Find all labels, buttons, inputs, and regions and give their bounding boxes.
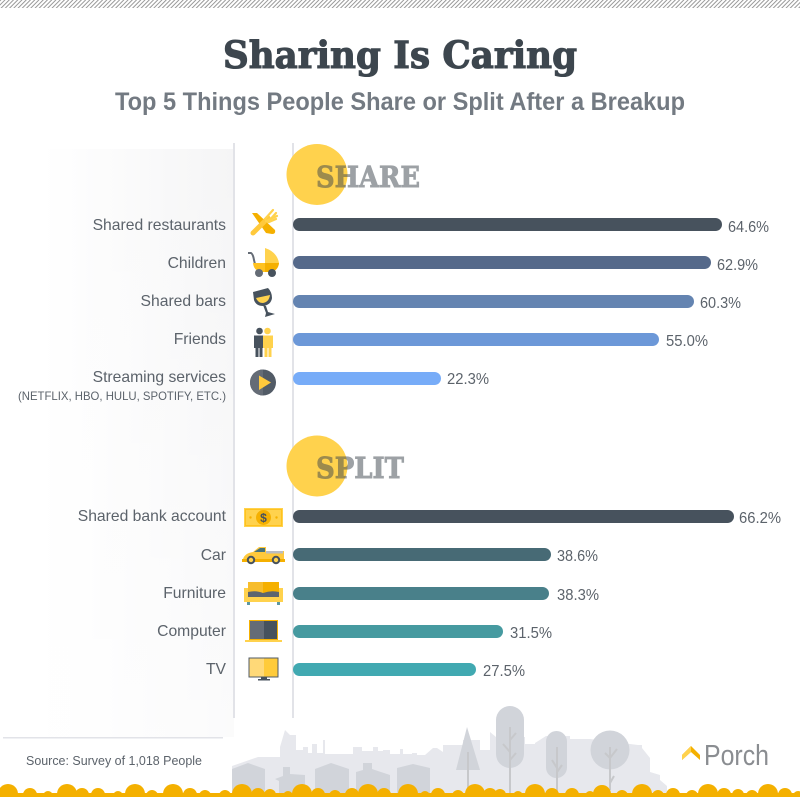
row: shared restaurants: 64.6%	[728, 219, 769, 236]
icon: wine glass	[253, 288, 275, 317]
row: computer: Computer	[157, 623, 226, 640]
column axis lines	[233, 143, 294, 718]
row: computer	[157, 620, 552, 642]
row: streaming services: 22.3%	[447, 371, 489, 388]
row: furniture	[163, 582, 599, 605]
row: friends: 55.0%	[666, 333, 708, 350]
row: shared bars: 60.3%	[700, 295, 741, 312]
subtitle: Top 5 Things People Share or Split After a Breakup	[115, 88, 685, 116]
illustration: city skyline and trees	[232, 706, 667, 797]
row: car: Car	[201, 547, 226, 564]
row: streaming services	[18, 369, 489, 403]
row: streaming services: (NETFLIX, HBO, HULU, SPOTIFY, ETC.)	[18, 389, 226, 403]
row: tv: 27.5%	[483, 663, 525, 680]
footer rule	[3, 737, 223, 738]
row: shared bars: Shared bars	[141, 293, 226, 310]
row: furniture: 38.3%	[557, 587, 599, 604]
row: children	[168, 248, 758, 277]
logo: porch	[682, 740, 769, 772]
row: friends	[174, 328, 708, 357]
icon: play button	[250, 370, 276, 396]
row: furniture: Furniture	[163, 585, 226, 602]
section heading: split: SPLIT	[316, 451, 404, 485]
section heading: share: SHARE	[316, 160, 420, 194]
section heading: share	[286, 144, 420, 205]
row: shared restaurants	[93, 210, 769, 236]
row: shared bank account: Shared bank account	[78, 508, 227, 525]
row: children: Children	[168, 255, 226, 272]
row: tv: TV	[206, 661, 227, 678]
icon: pickup truck	[242, 547, 285, 563]
icon: sofa	[244, 582, 283, 605]
logo: porch: Porch	[704, 740, 769, 772]
row: children: 62.9%	[717, 257, 758, 274]
row: computer: 31.5%	[510, 625, 552, 642]
row: friends: Friends	[174, 331, 226, 348]
top stripe band	[0, 0, 800, 8]
row: tv	[206, 658, 525, 680]
row: car	[201, 547, 598, 565]
yellow ground band	[0, 784, 800, 797]
panel: label column background	[42, 149, 234, 737]
row: shared restaurants: Shared restaurants	[93, 217, 226, 234]
icon: two people	[254, 328, 273, 357]
row: streaming services: Streaming services	[93, 369, 226, 386]
row: shared bank account: 66.2%	[739, 510, 781, 527]
row: shared bars	[141, 288, 741, 317]
row: shared bank account	[78, 508, 781, 527]
icon: stroller	[248, 248, 279, 277]
icon: banknote	[244, 508, 283, 527]
title: Sharing Is Caring	[223, 33, 577, 77]
icon: banknote: $	[260, 511, 267, 525]
section heading: split	[286, 436, 404, 496]
source note: Source: Survey of 1,018 People	[26, 754, 202, 768]
row: car: 38.6%	[557, 548, 598, 565]
icon: fork and knife	[252, 210, 277, 234]
icon: tv	[249, 658, 278, 680]
icon: laptop	[245, 620, 282, 642]
